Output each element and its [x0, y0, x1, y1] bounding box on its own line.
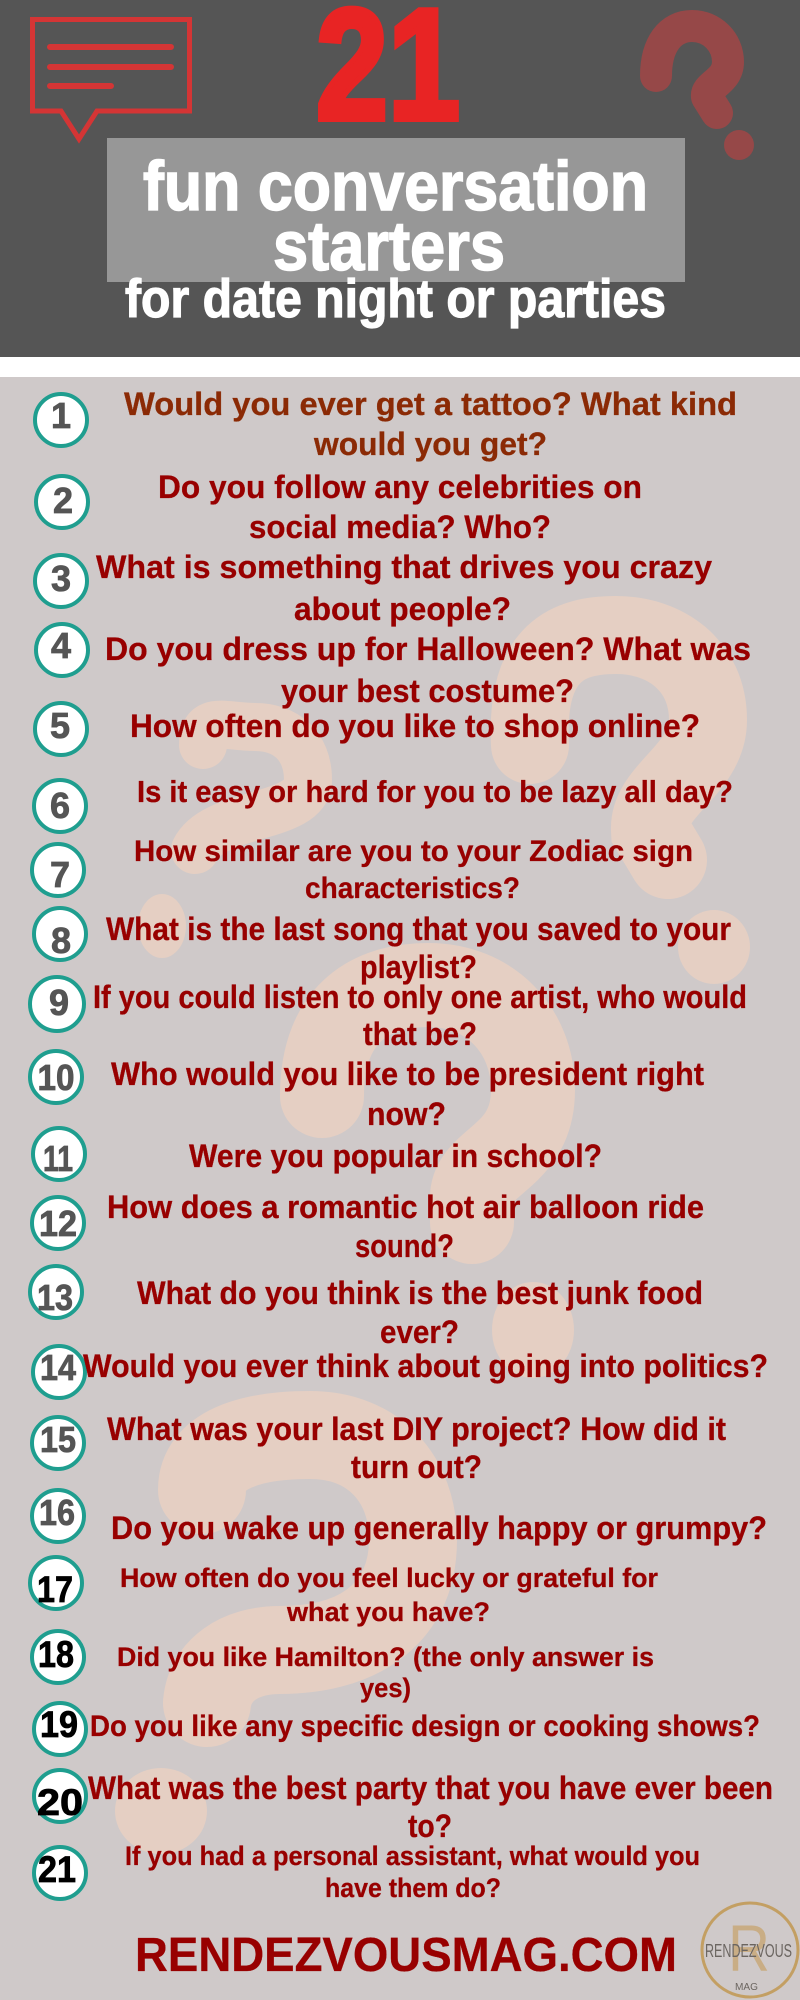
question 1: would you get? — [313, 426, 547, 462]
question 6 — [34, 774, 733, 832]
question 4: Do you dress up for Halloween? What was — [105, 631, 751, 667]
question 13 — [30, 1266, 703, 1350]
question 4: your best costume? — [281, 673, 574, 709]
question 5 — [35, 703, 700, 755]
question 15 — [32, 1411, 726, 1485]
question 5: How often do you like to shop online? — [130, 708, 700, 744]
question 11: 11 — [43, 1138, 73, 1179]
question 10: 10 — [38, 1057, 74, 1098]
icon: speech bubble — [32, 20, 190, 139]
question 7: 7 — [50, 854, 70, 895]
question 10: now? — [367, 1096, 446, 1132]
question 8: playlist? — [360, 949, 477, 985]
question 13: 13 — [37, 1277, 73, 1318]
question 7: How similar are you to your Zodiac sign — [134, 835, 693, 868]
question 11: Were you popular in school? — [189, 1138, 602, 1174]
question 2 — [36, 469, 642, 545]
question 17: How often do you feel lucky or grateful for — [120, 1563, 658, 1593]
question 7: characteristics? — [305, 872, 520, 905]
question 2: Do you follow any celebrities on — [158, 469, 642, 505]
question 9: 9 — [49, 982, 69, 1023]
question 3: What is something that drives you crazy — [96, 549, 712, 585]
question 15: turn out? — [351, 1449, 482, 1485]
question 21: have them do? — [325, 1873, 501, 1903]
question 16: 16 — [39, 1492, 75, 1533]
question 14: 14 — [40, 1347, 76, 1388]
question 20 — [34, 1770, 773, 1844]
background question marks — [115, 635, 750, 1854]
logo — [702, 1903, 798, 1997]
question 3: about people? — [294, 591, 511, 627]
question 15: What was your last DIY project? How did it — [107, 1411, 726, 1447]
question 4 — [36, 624, 751, 709]
footer website: RENDEZVOUSMAG.COM — [135, 1929, 677, 1982]
question 17 — [30, 1557, 658, 1627]
title backing box — [107, 138, 685, 282]
question 12 — [32, 1189, 704, 1264]
question 18: Did you like Hamilton? (the only answer is — [117, 1642, 654, 1672]
question 9: that be? — [363, 1016, 477, 1052]
question 21: If you had a personal assistant, what would you — [125, 1841, 700, 1871]
question 18: yes) — [360, 1673, 411, 1703]
question 1: 1 — [51, 395, 71, 436]
question 10 — [30, 1051, 704, 1132]
logo: MAG — [735, 1982, 758, 1993]
question 13: ever? — [380, 1314, 459, 1350]
question 5: 5 — [50, 705, 70, 746]
question 3: 3 — [51, 558, 71, 599]
question 6: Is it easy or hard for you to be lazy all day? — [137, 774, 733, 809]
question 19: Do you like any specific design or cooking shows? — [90, 1710, 760, 1743]
question 7 — [32, 835, 693, 905]
question 2: social media? Who? — [249, 509, 551, 545]
question 16 — [32, 1490, 767, 1546]
question 2: 2 — [53, 480, 73, 521]
logo: R — [728, 1911, 770, 1985]
question 6: 6 — [50, 785, 70, 826]
icon: question mark — [656, 26, 754, 160]
question 12: 12 — [39, 1203, 77, 1244]
question 8 — [34, 908, 731, 985]
question 17: 17 — [37, 1569, 73, 1610]
title: fun conversation — [143, 147, 648, 225]
question 4: 4 — [51, 625, 71, 666]
title — [143, 147, 648, 285]
title: starters — [273, 207, 505, 285]
question 14 — [33, 1346, 768, 1398]
question 21: 21 — [38, 1849, 76, 1890]
question 15: 15 — [40, 1419, 76, 1460]
question 14: Would you ever think about going into politics? — [83, 1348, 768, 1384]
question 17: what you have? — [286, 1597, 490, 1627]
question 19 — [34, 1703, 760, 1755]
question 12: How does a romantic hot air balloon ride — [107, 1189, 704, 1225]
header panel — [0, 0, 800, 357]
subtitle: for date night or parties — [125, 269, 666, 329]
question 9: If you could listen to only one artist, who would — [93, 979, 747, 1015]
question 8: 8 — [51, 920, 71, 961]
question 8: What is the last song that you saved to your — [106, 911, 731, 947]
question 10: Who would you like to be president right — [111, 1056, 704, 1092]
question 18 — [32, 1631, 654, 1703]
question 13: What do you think is the best junk food — [137, 1275, 703, 1311]
question 20: 20 — [37, 1782, 83, 1823]
question 21 — [34, 1841, 700, 1903]
question 20: to? — [408, 1808, 452, 1844]
question 3 — [35, 549, 712, 627]
question 11 — [33, 1128, 602, 1180]
question 1: Would you ever get a tattoo? What kind — [124, 386, 737, 422]
question 1 — [35, 386, 737, 462]
question 18: 18 — [38, 1634, 74, 1675]
question 9 — [30, 977, 747, 1052]
question 19: 19 — [40, 1704, 78, 1745]
question 16: Do you wake up generally happy or grumpy? — [111, 1510, 767, 1546]
question 12: sound? — [355, 1228, 454, 1264]
